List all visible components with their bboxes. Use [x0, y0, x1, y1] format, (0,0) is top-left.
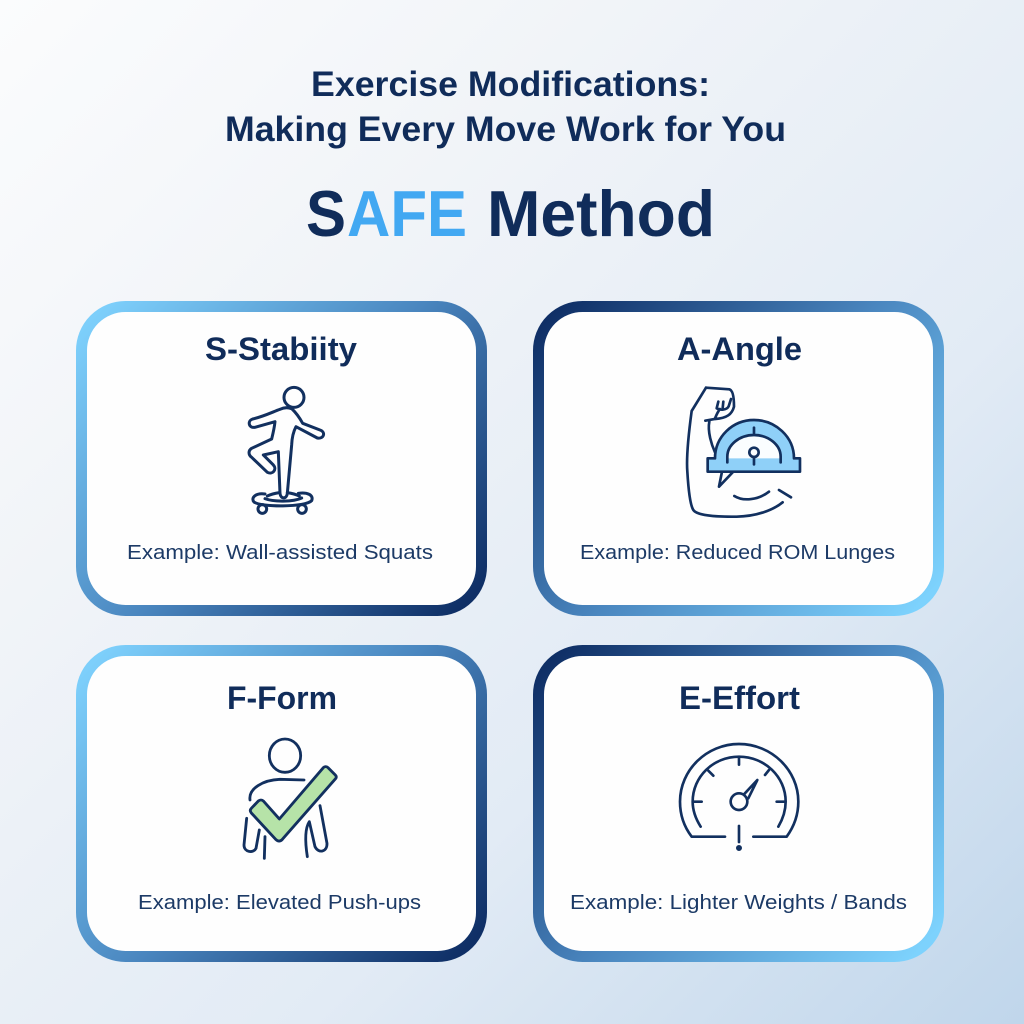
panel: F-Form [82, 650, 482, 956]
panel: E-Effort [538, 650, 938, 956]
panel heading: A-Angle: A-Angle [677, 331, 802, 367]
panel heading: F-Form: F-Form [227, 680, 337, 716]
panel heading: S-Stabiity: S-Stabiity [205, 331, 357, 367]
title [225, 65, 786, 149]
icon: person with green check mark [244, 739, 336, 858]
heading: SAFE Method: S [306, 177, 346, 250]
heading: SAFE Method: AFE [347, 177, 467, 250]
example text: Example: Wall-assisted Squats [127, 542, 433, 564]
panel: S-Stability [82, 306, 482, 610]
title: Exercise Modifications: [311, 65, 710, 104]
icon: flexed arm with protractor [687, 388, 800, 517]
heading: SAFE Method: Method [487, 177, 715, 250]
panel heading: E-Effort: E-Effort [679, 680, 800, 716]
panel: A-Angle [538, 306, 938, 610]
example text: Example: Lighter Weights / Bands [570, 892, 907, 914]
example text: Example: Reduced ROM Lunges [580, 542, 895, 564]
heading: SAFE Method [306, 177, 715, 250]
example text: Example: Elevated Push-ups [138, 892, 421, 914]
icon: person balancing on board [249, 387, 324, 513]
title: Making Every Move Work for You [225, 110, 786, 149]
icon: speedometer gauge with exclamation mark [680, 744, 798, 850]
